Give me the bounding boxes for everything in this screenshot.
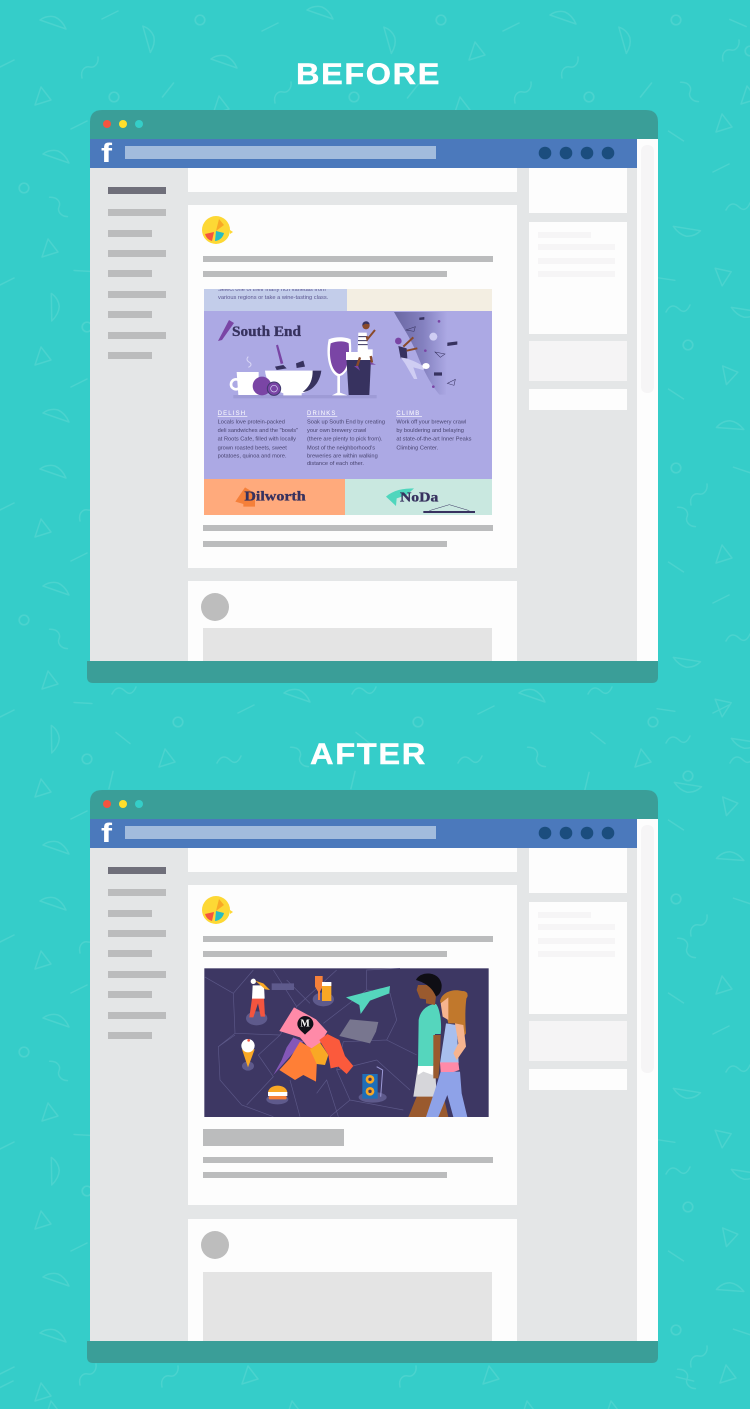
browser window: before — [87, 110, 658, 683]
scrollbar column — [637, 819, 658, 1341]
heading: BEFORE: BEFORE — [296, 58, 441, 91]
column texts: CLIMB — [396, 411, 420, 417]
map pin — [297, 1016, 313, 1035]
column texts: Work off your brewery crawl — [396, 420, 466, 426]
beer glass — [346, 352, 372, 395]
burger — [266, 1086, 288, 1104]
column texts: Climbing Center. — [396, 445, 439, 451]
column texts — [218, 411, 472, 467]
right column cards — [529, 848, 627, 1090]
illustration: food, drinks and climber — [218, 312, 475, 513]
column texts: Soak up South End by creating — [307, 420, 385, 426]
scrollbar column — [637, 139, 658, 661]
infographic excerpt — [204, 284, 492, 515]
post card — [188, 205, 517, 568]
heading: NoDa — [386, 488, 475, 513]
pin letter: M — [300, 1019, 310, 1030]
avatar — [202, 216, 233, 244]
heading: South End — [218, 320, 302, 341]
column texts: deli sandwiches and the "bowls" — [218, 428, 298, 434]
heading: AFTER: AFTER — [310, 738, 427, 771]
speaker — [359, 1067, 387, 1103]
post title bar — [203, 1129, 344, 1146]
column texts: breweries are within walking — [307, 453, 378, 459]
heading: NoDa: NoDa — [400, 490, 438, 505]
beet — [253, 377, 281, 395]
window controls — [103, 120, 143, 128]
excerpt intro text — [218, 287, 329, 301]
heading: South End: South End — [232, 324, 302, 340]
post text lines — [203, 256, 493, 277]
window title bar — [90, 110, 658, 140]
walking man — [408, 974, 448, 1117]
facebook top bar: f — [101, 138, 113, 168]
ice cream — [241, 1039, 255, 1071]
page background — [90, 848, 637, 1341]
column texts: at state-of-the-art Inner Peaks — [396, 437, 472, 443]
post text lines — [203, 936, 493, 957]
excerpt intro text: various regions or take a wine-tasting class. — [218, 295, 329, 301]
column texts: at Roots Cafe, filled with locally — [218, 437, 296, 443]
top feed card — [188, 168, 517, 192]
column texts: Locals love protein-packed — [218, 420, 285, 426]
facebook top bar — [90, 818, 637, 848]
heading: Dilworth: Dilworth — [244, 490, 306, 505]
column texts: (there are plenty to pick from). — [307, 437, 383, 443]
post text lines below image — [203, 525, 493, 547]
heading: Dilworth — [235, 487, 306, 507]
post card — [188, 885, 517, 1205]
column texts: by bouldering and belaying — [396, 428, 464, 434]
saxophone player — [246, 979, 294, 1025]
map roads — [204, 968, 417, 1117]
climber — [395, 337, 430, 379]
browser window: after — [87, 790, 658, 1363]
next post card — [188, 1219, 517, 1341]
left sidebar menu — [108, 867, 166, 1039]
window bottom bar — [87, 1341, 658, 1363]
excerpt intro text: Select one of their many rich varietals from — [218, 287, 326, 293]
wine glass — [327, 337, 351, 395]
drinks — [313, 976, 334, 1006]
bowl — [265, 345, 321, 395]
post text lines below image — [203, 1157, 493, 1178]
column texts: grown roasted beets, sweet — [218, 445, 287, 451]
page background — [90, 168, 637, 661]
walking woman — [426, 990, 468, 1117]
top feed card — [188, 848, 517, 872]
window bottom bar — [87, 661, 658, 683]
column texts: potatoes, quinoa and more. — [218, 453, 287, 459]
climbing wall — [394, 312, 457, 395]
column texts: Most of the neighborhood's — [307, 445, 375, 451]
column texts: DRINKS — [307, 411, 337, 417]
left sidebar menu — [108, 187, 166, 359]
facebook top bar — [90, 138, 637, 168]
right column cards — [529, 168, 627, 410]
neighbourhood shapes — [273, 986, 390, 1082]
illustrated map image — [204, 968, 489, 1117]
avatar — [202, 896, 233, 924]
facebook top bar: f — [101, 818, 113, 848]
column texts: your own brewery crawl — [307, 428, 366, 434]
column texts: distance of each other. — [307, 461, 364, 467]
column texts: DELISH — [218, 411, 246, 417]
sitting man — [354, 321, 376, 371]
window controls — [103, 800, 143, 808]
mug — [231, 357, 259, 395]
window title bar — [90, 790, 658, 820]
next post card — [188, 581, 517, 661]
